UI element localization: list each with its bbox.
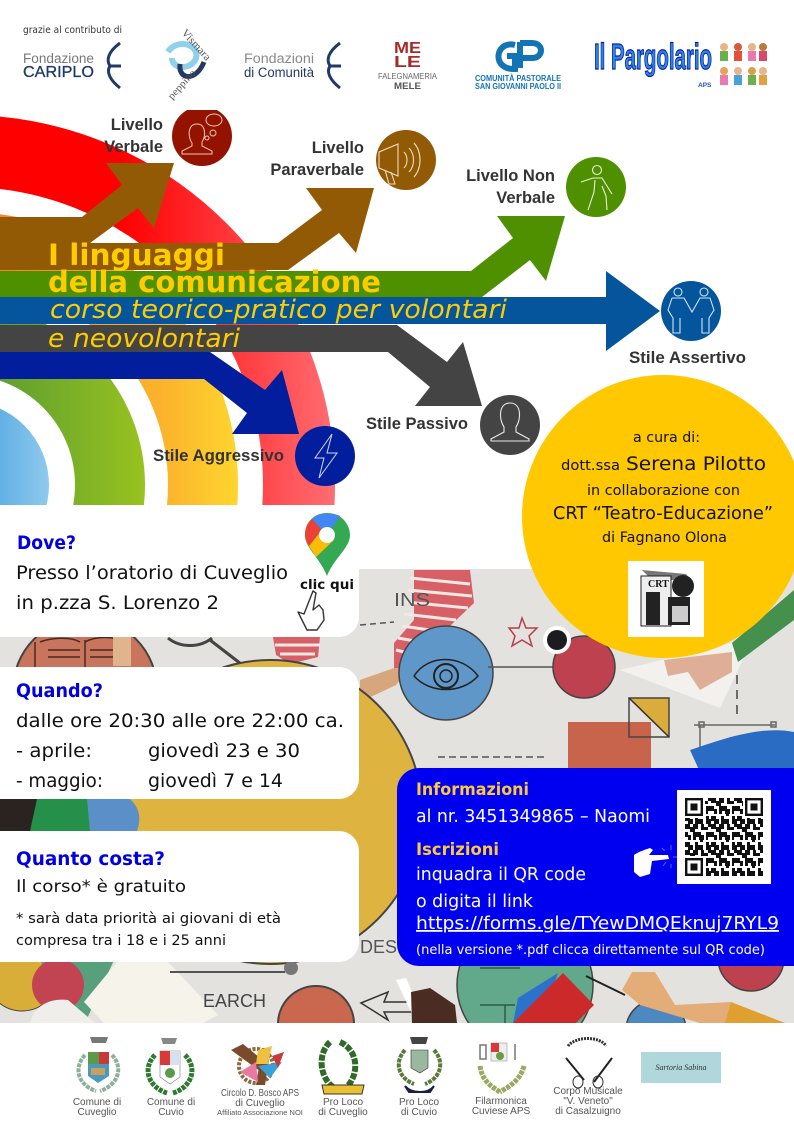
price text: Il corso* è gratuito	[16, 877, 186, 897]
logo: Comune di Cuvio	[147, 1038, 195, 1118]
panel: when	[0, 667, 359, 799]
schedule: - aprile:	[16, 740, 92, 762]
orange circle	[277, 985, 355, 1023]
logo: Corpo Musicale V. Veneto: di Casalzuigno	[555, 1106, 621, 1117]
squares	[568, 722, 651, 772]
label: Livello Non Verbale	[466, 167, 555, 207]
logo: Comune di Cuveglio: Comune di	[73, 1097, 121, 1108]
logo: CRT: CRT	[648, 579, 669, 590]
icon: passive person silhouette	[480, 395, 540, 455]
logo: Filarmonica Cuviese APS: Cuviese APS	[472, 1106, 531, 1117]
hair green and blue shapes	[0, 799, 37, 831]
logo: Fondazione Cariplo	[23, 43, 121, 88]
heading: Quanto costa: Quanto costa?	[16, 848, 165, 870]
book circle	[16, 637, 154, 667]
selection shape and blue shirt	[694, 721, 777, 747]
logo: Pro Loco di Cuvio: di Cuvio	[401, 1107, 437, 1118]
rainbow arcs	[0, 116, 335, 505]
label: Livello Non Verbale: Verbale	[496, 189, 555, 207]
schedule	[16, 710, 344, 792]
schedule: giovedì 7 e 14	[148, 770, 283, 792]
notebook	[84, 962, 218, 1023]
subtitle: e neovolontari	[48, 324, 241, 354]
label: Livello Non Verbale: Livello Non	[466, 167, 555, 185]
heading: Dove: Dove?	[17, 532, 76, 554]
schedule: dalle ore 20:30 alle ore 22:00 ca.	[16, 710, 344, 732]
logo: Filarmonica Cuviese APS	[472, 1043, 531, 1117]
logo: Fondazione Vismara: peppino	[166, 68, 198, 102]
title	[48, 238, 508, 354]
logo: Fondazioni di Comunità	[244, 43, 341, 88]
label: Stile Assertivo: Stile Assertivo	[629, 349, 746, 367]
enrolment instructions	[416, 864, 779, 934]
label: Stile Passivo: Stile Passivo	[366, 415, 468, 433]
logo: Falegnameria Mele: MELE	[394, 81, 421, 92]
logo: Falegnameria Mele: LE	[394, 54, 421, 71]
priority note: * sarà data priorità ai giovani di età	[16, 911, 281, 927]
logo: CRT	[628, 561, 704, 637]
QR code	[677, 790, 771, 884]
red circle	[553, 636, 615, 698]
panel: where	[0, 505, 359, 637]
sponsor logos	[23, 25, 767, 102]
enrolment instructions: https://forms.gle/TYewDMQEknuj7RYL9	[416, 913, 779, 934]
panel: curated by: dott.ssa	[561, 458, 620, 474]
yellow circle	[118, 660, 422, 964]
enrolment instructions: inquadra il QR code	[416, 864, 586, 885]
footer partner logos	[0, 1023, 794, 1123]
logo: Sartoria Sabina: Sartoria Sabina	[656, 1063, 706, 1072]
label: Livello Paraverbale	[270, 139, 364, 179]
arrow: passive style	[0, 325, 482, 406]
logo: Filarmonica Cuviese APS: Filarmonica	[475, 1096, 527, 1107]
outlined star	[509, 618, 537, 646]
label: Livello Paraverbale: Paraverbale	[270, 161, 364, 179]
logo: Comune di Cuveglio: Cuveglio	[78, 1107, 117, 1118]
logo: Pro Loco di Cuveglio: Pro Loco	[323, 1097, 363, 1108]
logo: Pro Loco di Cuveglio	[318, 1042, 368, 1118]
heading: Informazioni: Informazioni	[416, 780, 529, 800]
top right red circle	[718, 966, 784, 992]
white paper and hand	[620, 640, 744, 708]
label: Livello Verbale: Verbale	[104, 138, 163, 156]
panel: curated by	[522, 375, 794, 658]
heading: Iscrizioni: Iscrizioni	[416, 840, 499, 860]
logo: Fondazione Vismara	[166, 27, 213, 102]
link: clic qui: clic qui	[300, 578, 354, 593]
logo: Falegnameria Mele	[378, 40, 437, 92]
red striped sleeve	[273, 570, 474, 672]
logo: Pro Loco di Cuveglio: di Cuveglio	[318, 1107, 368, 1118]
background photo: INS	[394, 590, 430, 610]
magnifier	[167, 637, 241, 663]
icon: map pin	[305, 513, 350, 576]
outlined arrow	[361, 992, 411, 1020]
panel: curated by: a cura di:	[633, 430, 700, 446]
logo: Comune di Cuvio: Comune di	[147, 1097, 195, 1108]
logo: Comunità Pastorale	[475, 42, 562, 91]
logo: Circolo D. Bosco APS: Affiliato Associazione NOI	[217, 1108, 303, 1117]
skin hand	[360, 668, 399, 697]
logo: Il Pargolario APS	[594, 36, 767, 89]
label: Livello Paraverbale: Livello	[312, 139, 364, 157]
arm and sleeve	[586, 976, 625, 995]
label: Stile Aggressivo: Stile Aggressivo	[153, 447, 284, 465]
logo: Sartoria Sabina	[641, 1052, 721, 1083]
panel: cost	[0, 831, 359, 962]
logo: Falegnameria Mele: ME	[394, 40, 421, 57]
logo: Corpo Musicale V. Veneto: Corpo Musicale	[553, 1086, 623, 1097]
icon: aggressive lightning bolt	[295, 426, 355, 486]
blue circle	[626, 1004, 686, 1023]
logo: Il Pargolario APS: APS	[698, 82, 712, 89]
contribution caption: grazie al contributo di	[23, 25, 122, 36]
logo: Comunità Pastorale: COMUNITÀ PASTORALE	[475, 74, 562, 83]
logo: Fondazione Cariplo: CARIPLO	[23, 64, 94, 81]
logo: Comunità Pastorale: SAN GIOVANNI PAOLO II	[475, 82, 561, 91]
priority note: compresa tra i 18 e i 25 anni	[16, 933, 226, 949]
title: I linguaggi	[48, 238, 225, 272]
logo: Fondazioni di Comunità: di Comunità	[244, 65, 314, 80]
logo: Fondazione Cariplo: Fondazione	[23, 51, 94, 66]
arrow: aggressive style	[0, 352, 299, 434]
label: Livello Verbale	[104, 116, 163, 156]
background photo: EARCH	[203, 991, 266, 1011]
logo: Circolo D. Bosco APS: Circolo D. Bosco APS	[221, 1088, 299, 1099]
bottom left circles	[0, 962, 42, 1012]
green sleeve	[732, 590, 794, 662]
icon: paraverbal megaphone	[376, 130, 436, 190]
enrolment instructions: o digita il link	[416, 891, 534, 912]
blue eye circle	[399, 626, 493, 720]
title: della comunicazione	[48, 265, 381, 299]
logo: Falegnameria Mele: FALEGNAMERIA	[378, 71, 437, 81]
subtitle	[48, 295, 508, 354]
logo: Comune di Cuveglio	[73, 1037, 121, 1118]
logo: Comune di Cuvio: Cuvio	[158, 1107, 184, 1118]
logo: Fondazioni di Comunità: Fondazioni	[244, 51, 314, 66]
icon: pointing hand	[298, 591, 324, 630]
logo: Circolo D. Bosco APS: di Cuveglio	[235, 1098, 285, 1109]
address: in p.zza S. Lorenzo 2	[16, 592, 219, 614]
arrow: non verbal level	[0, 216, 565, 297]
address: Presso l’oratorio di Cuveglio	[16, 562, 288, 584]
subtitle: corso teorico-pratico per volontari	[50, 295, 508, 325]
panel: curated by: CRT “Teatro-Educazione”	[553, 503, 773, 524]
address	[16, 562, 288, 614]
logo: Circolo D. Bosco APS	[217, 1044, 303, 1117]
schedule: - maggio:	[16, 770, 103, 792]
logo: Corpo Musicale V. Veneto: "V. Veneto"	[563, 1096, 613, 1107]
label: Livello Verbale: Livello	[111, 116, 163, 134]
pdf note: (nella versione *.pdf clicca direttamente sul QR code)	[416, 942, 765, 958]
priority note	[16, 911, 281, 949]
icon: verbal head with thought bubbles	[172, 106, 232, 166]
green circle with screen	[456, 966, 594, 1023]
panel: information	[397, 768, 794, 966]
heading: Quando: Quando?	[16, 680, 103, 702]
icon: non verbal walking person	[566, 157, 626, 217]
arrow: paraverbal level	[0, 188, 374, 270]
logo: Fondazione Vismara: Vismara	[179, 27, 213, 63]
panel: curated by: Serena Pilotto	[626, 453, 766, 475]
background photo	[0, 569, 794, 1062]
background photo: DESIG	[360, 937, 416, 957]
panel: curated by: di Fagnano Olona	[602, 530, 727, 546]
arrow: assertive style	[0, 271, 660, 351]
icon: pointing hand	[634, 845, 678, 877]
phone: al nr. 3451349865 – Naomi	[416, 806, 650, 827]
arrow: verbal level	[0, 163, 174, 243]
dashed connector	[736, 675, 738, 714]
logo: Pro Loco di Cuvio	[399, 1037, 440, 1118]
icon: assertive handshake	[661, 281, 721, 341]
red book	[513, 973, 558, 1023]
dark hand	[396, 978, 412, 1014]
schedule: giovedì 23 e 30	[148, 740, 300, 762]
logo: Pro Loco di Cuvio: Pro Loco	[399, 1097, 439, 1108]
coffee cup	[543, 626, 571, 654]
logo: Corpo Musicale V. Veneto	[553, 1038, 623, 1117]
panel: curated by: in collaborazione con	[587, 483, 740, 499]
